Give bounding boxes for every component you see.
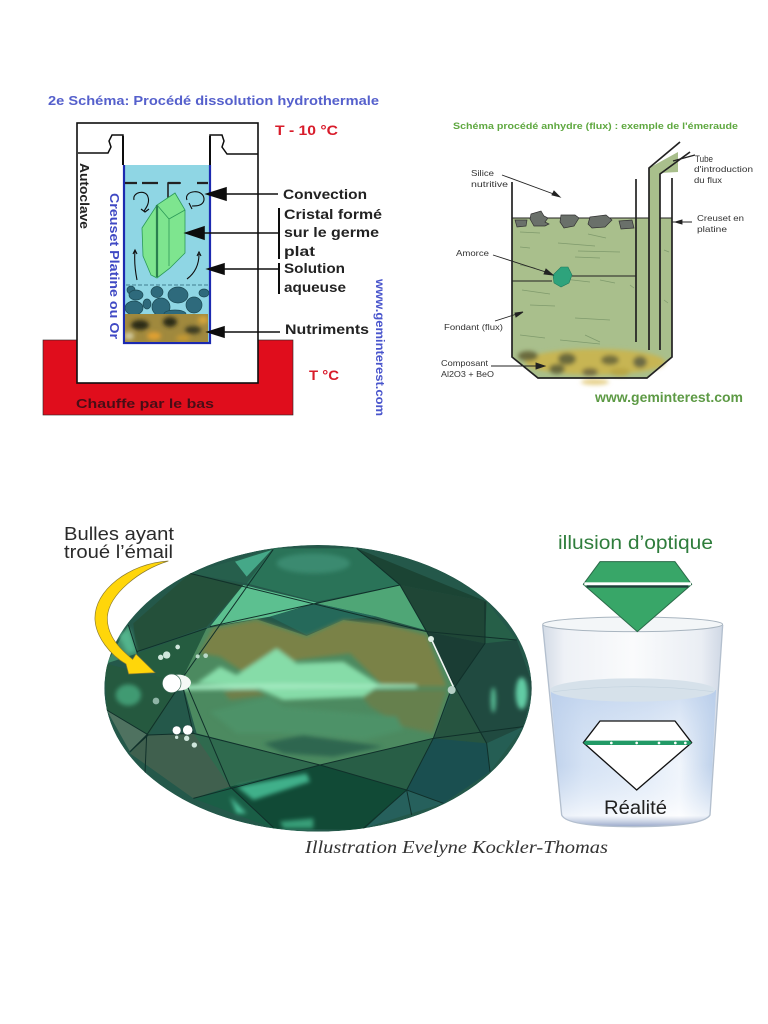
- water glass: [543, 617, 723, 827]
- heading: hydrothermal diagram title: 2e Schéma: Procédé dissolution hydrothermale: [48, 94, 379, 108]
- label: Solution aqueuse: [284, 260, 346, 295]
- label: website: www.geminterest.com: [594, 390, 743, 405]
- label: Creuset en platine: platine: [697, 225, 728, 234]
- flux introduction tube: [649, 142, 690, 350]
- panel: oval gemstone with bubbles: [95, 545, 533, 832]
- callout arrows: [186, 188, 280, 337]
- panel: anhydrous flux diagram: [441, 121, 754, 405]
- seed crystal: [553, 267, 572, 287]
- bubbles and inclusions: [153, 636, 456, 748]
- nutrient deposit: [518, 349, 665, 385]
- label: Tube d'introduction du flux: du flux: [694, 176, 722, 185]
- label: Nutriments: Nutriments: [285, 322, 369, 337]
- crucible with aqueous solution: [123, 136, 210, 343]
- label: Cristal formé sur le germe plat: sur le germe: [284, 224, 379, 240]
- panel: optical illusion glass: [543, 562, 723, 827]
- label: Tube d'introduction du flux: [694, 154, 754, 185]
- label: illusion d'optique: illusion d’optique: [558, 533, 713, 554]
- label: Tube d'introduction du flux: Tube: [695, 154, 713, 165]
- flux liquid: [512, 218, 672, 378]
- label: Tube d'introduction du flux: d'introduction: [694, 165, 754, 174]
- label: Autoclave: Autoclave: [77, 163, 92, 229]
- inner wall and flux level: [512, 179, 672, 342]
- nutrients and stones: [124, 286, 209, 342]
- bright reflections: [116, 553, 528, 828]
- label: Creuset Platine ou Or: Creuset Platine ou Or: [107, 193, 122, 339]
- label: T°C: T °C: [309, 367, 339, 383]
- label: Composant Al2O3 + BeO: Al2O3 + BeO: [441, 370, 494, 379]
- label: Cristal formé sur le germe plat: Cristal formé: [284, 206, 382, 222]
- icon: illusion gem: [583, 562, 692, 632]
- label: Composant Al2O3 + BeO: [441, 359, 494, 379]
- crystal on flat seed: [142, 183, 185, 278]
- label: Réalité: Réalité: [604, 798, 667, 819]
- gemstone facets: [104, 545, 533, 832]
- convection flow arrows: [133, 192, 204, 280]
- label: Solution aqueuse: Solution: [284, 260, 345, 276]
- label: T - 10°C: T - 10 °C: [275, 122, 338, 138]
- label: Bulles ayant troué l'émail: Bulles ayant: [64, 523, 174, 544]
- credit: illustrator: Illustration Evelyne Kockler-Thomas: [304, 837, 608, 857]
- label: Composant Al2O3 + BeO: Composant: [441, 359, 489, 368]
- label: Chauffe par le bas: Chauffe par le bas: [76, 396, 214, 411]
- flux ripple marks: [520, 232, 669, 344]
- label: Convection: Convection: [283, 186, 367, 202]
- panel: hydrothermal dissolution diagram: [43, 94, 387, 416]
- label: Solution aqueuse: aqueuse: [284, 279, 346, 295]
- heating base: [43, 340, 293, 415]
- label: Cristal formé sur le germe plat: plat: [284, 243, 315, 259]
- label: Silice nutritive: nutritive: [471, 180, 509, 189]
- label: vertical website: www.geminterest.com: [373, 278, 387, 416]
- facet lines: [107, 548, 523, 828]
- label: Creuset en platine: Creuset en: [697, 214, 745, 223]
- label: Amorce: Amorce: [456, 249, 490, 258]
- pointer arrows: [491, 155, 695, 369]
- icon: real gem: [583, 721, 692, 790]
- table facet: [182, 619, 452, 765]
- autoclave vessel: [77, 123, 258, 383]
- label: Bulles ayant troué l'émail: [64, 523, 174, 562]
- label: Cristal formé sur le germe plat: [284, 206, 382, 259]
- arrow: yellow curved pointer: [95, 561, 168, 674]
- platinum crucible walls: [512, 178, 672, 378]
- label: Silice nutritive: [471, 169, 509, 189]
- heading: flux diagram title: Schéma procédé anhydre (flux) : exemple de l'émeraude: [453, 121, 738, 132]
- silica nutrient stones: [515, 211, 634, 229]
- label: Fondant (flux): Fondant (flux): [444, 323, 503, 332]
- label: Silice nutritive: Silice: [471, 169, 495, 178]
- label: Bulles ayant troué l'émail: troué l’émail: [64, 541, 173, 562]
- label: Creuset en platine: [697, 214, 745, 234]
